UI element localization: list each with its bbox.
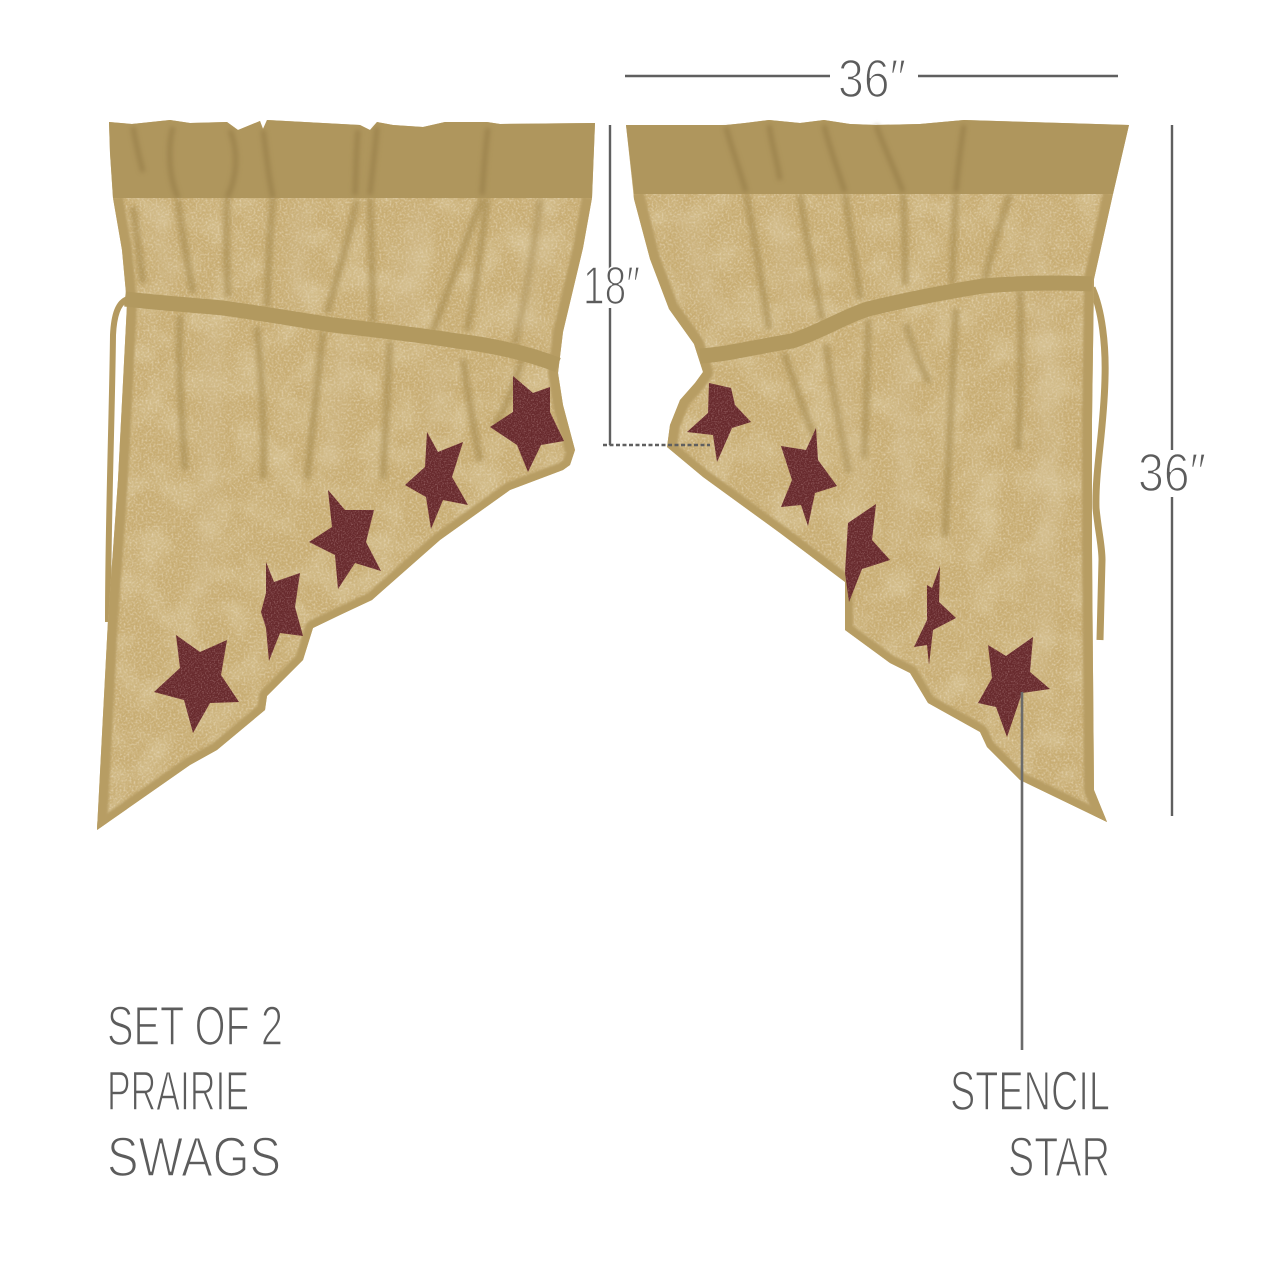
star fabric speckle <box>140 370 1060 740</box>
label: set of 2 prairie swags: PRAIRIE <box>107 1059 249 1122</box>
hem along bottom edge <box>667 447 1107 822</box>
label: set of 2 prairie swags <box>107 994 283 1188</box>
curtain fabric body <box>626 120 1129 822</box>
star 3 <box>845 504 890 602</box>
fabric speckle <box>108 198 582 812</box>
dimension: drop 18 in: 18″ <box>583 256 640 316</box>
star 2 <box>261 562 303 661</box>
dimension: top width 36 in: 36″ <box>838 49 906 109</box>
band gathers <box>133 127 488 198</box>
dimension: side height 36 in: 36″ <box>1138 443 1206 503</box>
label: stencil star <box>950 1059 1110 1188</box>
hem along sides <box>634 194 1113 822</box>
curtain fabric body <box>97 120 595 830</box>
panel: left curtain <box>90 110 610 840</box>
tie string left <box>108 299 128 622</box>
band gathers <box>726 125 964 192</box>
header band <box>109 120 595 198</box>
hem along bottom edge <box>97 450 575 830</box>
star 4 <box>405 432 468 529</box>
label: stencil star: STENCIL <box>950 1059 1110 1122</box>
panel: right curtain <box>620 110 1140 840</box>
fabric blotches <box>650 194 1102 800</box>
star 5 <box>490 376 564 472</box>
star 5 <box>978 637 1050 737</box>
fabric folds <box>133 198 540 479</box>
star 3 <box>309 490 381 589</box>
infographic canvas <box>97 60 1204 1176</box>
star 2 <box>781 428 837 526</box>
header band <box>626 120 1129 194</box>
callout line: stencil star <box>1021 692 1023 1050</box>
gathered drawstring band <box>125 299 558 365</box>
star 4 <box>914 566 956 665</box>
fabric folds <box>746 194 1021 537</box>
label: stencil star: STAR <box>1008 1125 1110 1188</box>
star 1 <box>154 635 239 733</box>
hem along sides <box>97 198 592 830</box>
gathered drawstring band <box>700 283 1092 356</box>
tie string right <box>1092 288 1105 640</box>
label: set of 2 prairie swags: SET OF 2 <box>107 994 283 1057</box>
fabric speckle <box>628 148 1103 804</box>
label: set of 2 prairie swags: SWAGS <box>107 1125 281 1188</box>
fabric blotches <box>108 198 570 812</box>
star 1 <box>687 383 751 462</box>
